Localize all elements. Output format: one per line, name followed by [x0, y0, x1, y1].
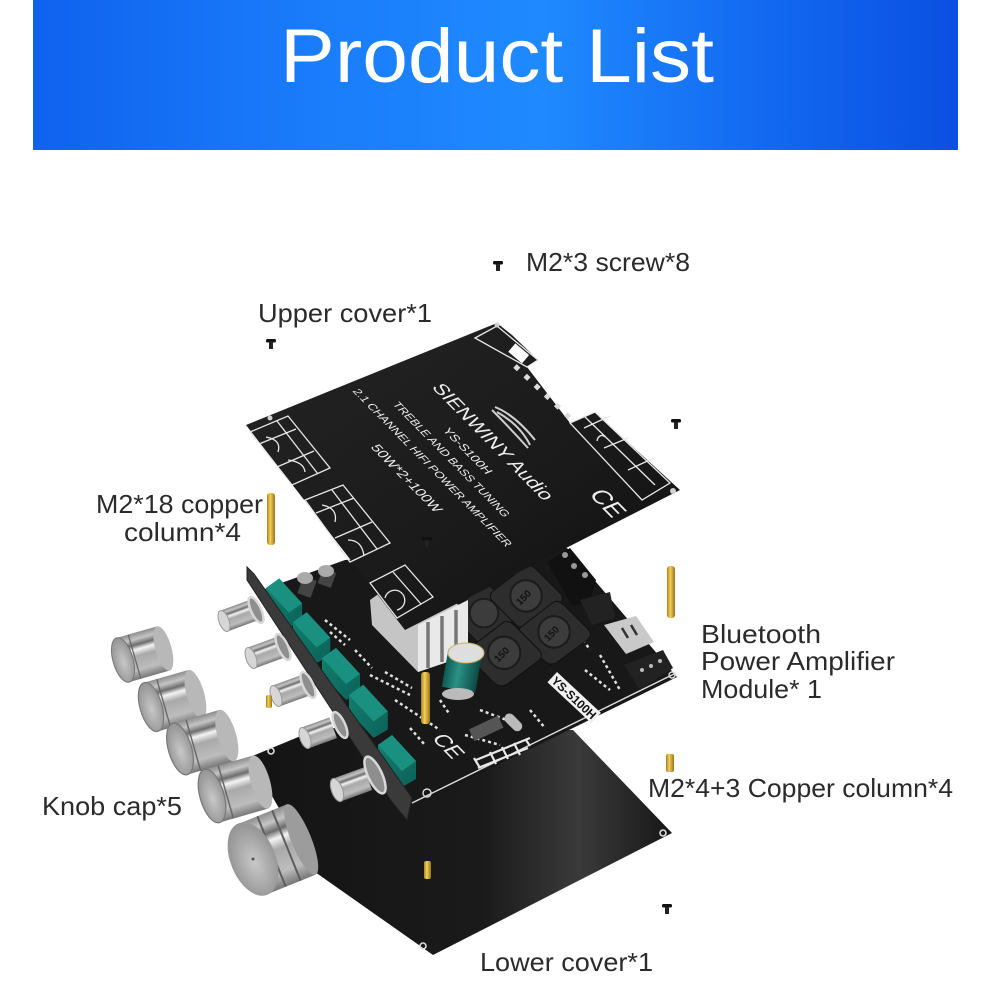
label: amplifier module: Power Amplifier: [701, 646, 895, 676]
amplifier module board: [262, 548, 677, 807]
CE mark: CE: [582, 486, 633, 521]
inductors: 150: [542, 624, 562, 644]
knob caps: [107, 624, 325, 902]
electrolytic capacitors small: [297, 565, 336, 598]
copper columns: [266, 493, 675, 879]
front panel with shafts: [216, 567, 412, 820]
channel control box: [305, 485, 390, 562]
washers: [246, 595, 390, 796]
silk text: YS-S100H: [439, 427, 494, 476]
inductors: 150: [514, 588, 534, 608]
logo swoosh: [492, 407, 535, 448]
usb port: [604, 616, 654, 654]
label: knob cap: Knob cap*5: [42, 791, 182, 821]
crystal: [502, 711, 524, 733]
silk text: SIENWINY Audio: [426, 381, 558, 503]
screws: [266, 261, 681, 914]
audio jack: [624, 650, 673, 690]
label: long copper column: M2*18 copper: [96, 489, 263, 519]
shafts: [216, 600, 372, 803]
inductors: [452, 565, 590, 686]
pcb components silkscreen: [325, 620, 620, 745]
board CE mark: CE: [426, 730, 471, 762]
banner: [33, 0, 958, 150]
label: amplifier module: [701, 619, 895, 704]
label: screw: M2*3 screw*8: [526, 247, 690, 277]
lower cover: [250, 728, 672, 955]
heatsink: [370, 575, 468, 672]
label: amplifier module: Module* 1: [701, 674, 822, 704]
connector marks: [515, 366, 570, 418]
board copper column: [421, 672, 430, 724]
large knob: [218, 801, 325, 902]
connector silk right: [475, 326, 670, 500]
label: lower cover: Lower cover*1: [480, 947, 653, 977]
model label: YS-S100H: [549, 674, 599, 722]
upper cover: [246, 322, 680, 630]
board outline and hole: [412, 672, 676, 803]
silk text: 2.1 CHANNEL HIFI POWER AMPLIFIER: [349, 388, 514, 548]
silk text: [349, 381, 558, 548]
label: long copper column: column*4: [124, 517, 241, 547]
silk text: TREBLE AND BASS TUNING: [389, 401, 512, 519]
bluetooth antenna: [474, 738, 530, 768]
aux jack upper: [580, 592, 615, 625]
inductors: 150: [492, 645, 512, 665]
title: Product List: [280, 14, 714, 99]
terminal block: [547, 548, 596, 606]
silk text: 50W*2+100W: [367, 442, 446, 514]
label: upper cover: Upper cover*1: [258, 298, 432, 328]
label: long copper column: [96, 489, 263, 547]
potentiometers: [266, 578, 416, 787]
chip: [469, 716, 503, 741]
label: short copper column: M2*4+3 Copper column*4: [648, 773, 953, 803]
mounting holes: [268, 748, 666, 949]
subwoofer control box: [250, 416, 330, 485]
master volume box: [370, 565, 433, 618]
holes: [268, 322, 676, 494]
label: amplifier module: Bluetooth: [701, 619, 821, 649]
large capacitor: [442, 643, 484, 700]
